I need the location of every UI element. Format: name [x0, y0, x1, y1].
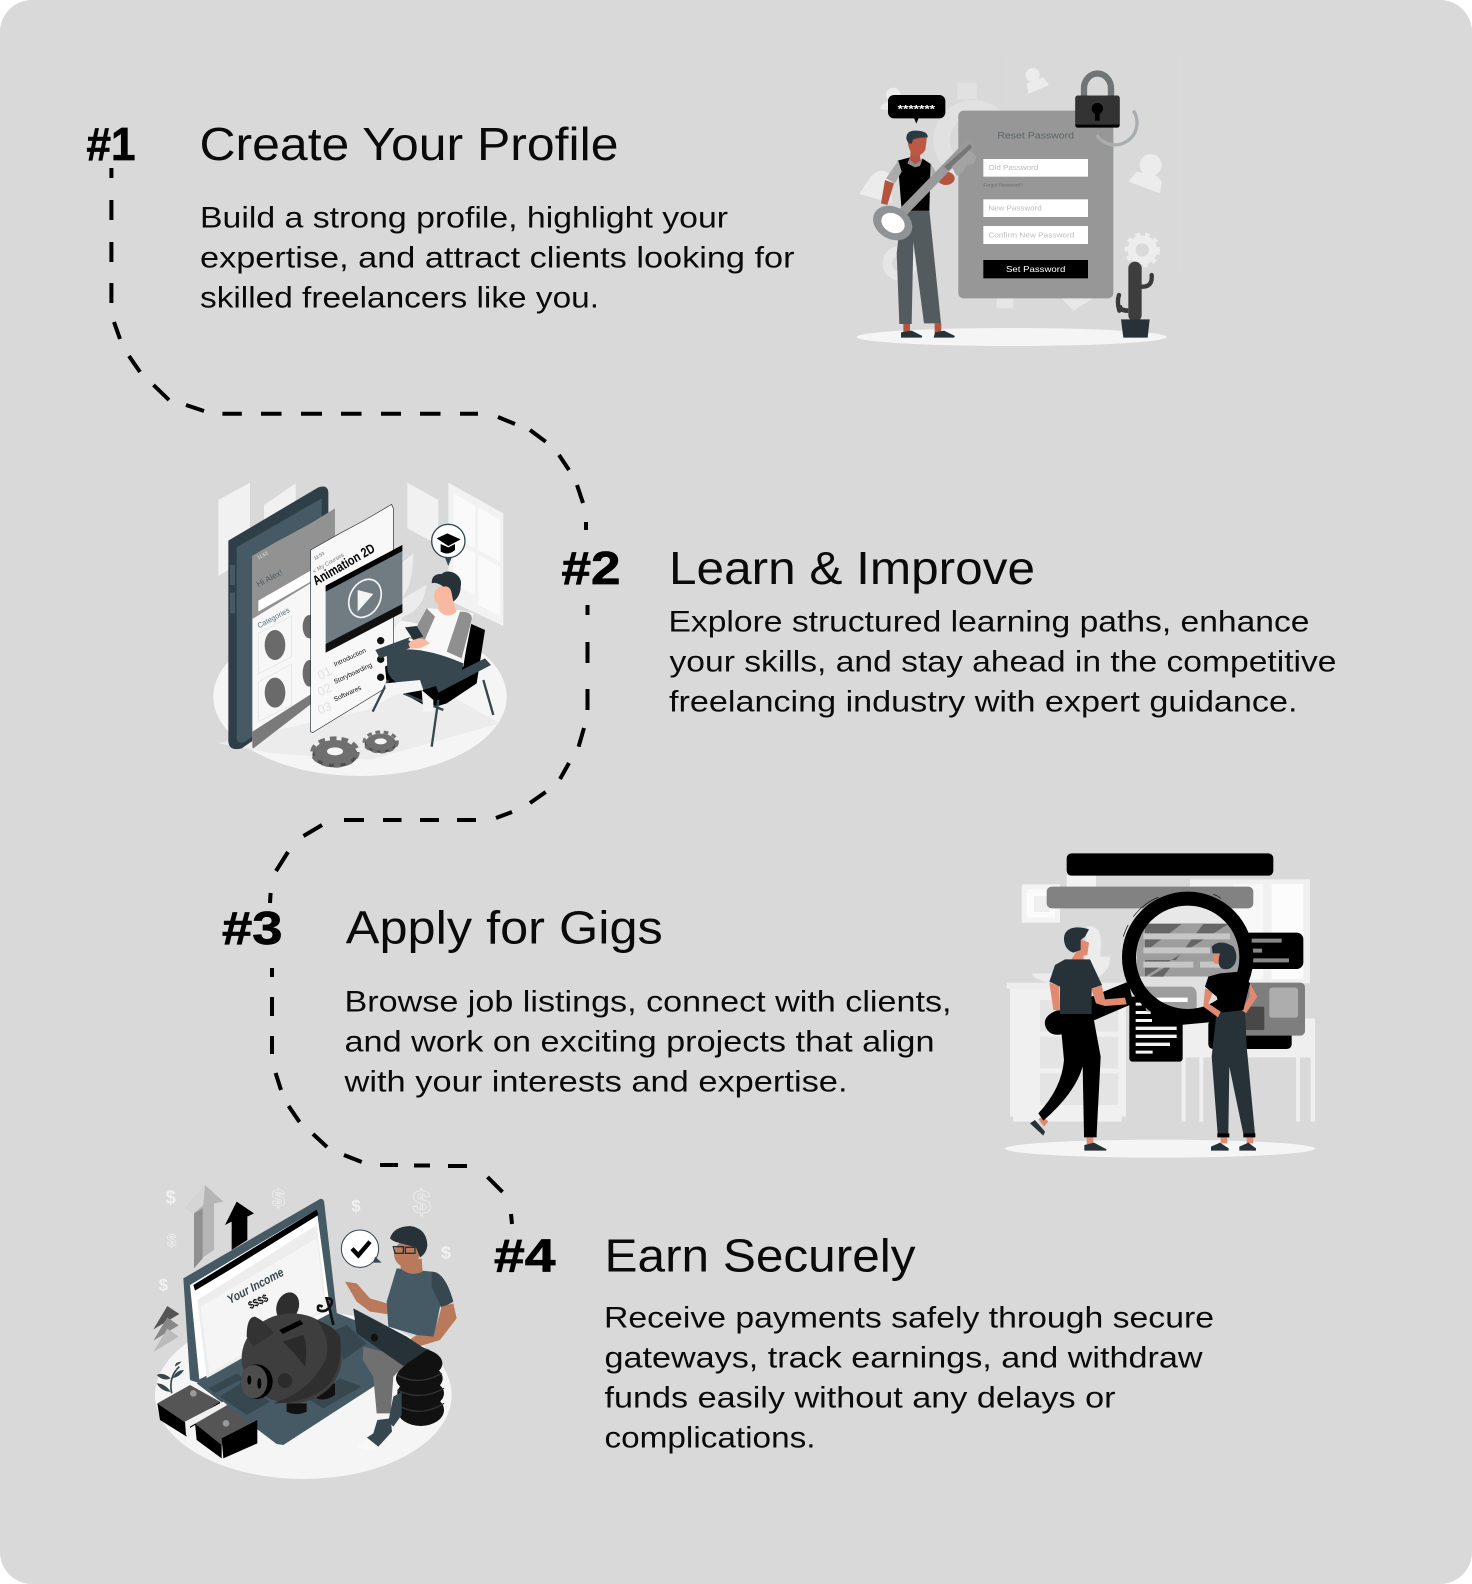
illustration: job search [1005, 853, 1315, 1158]
step 4 description: gateways, track earnings, and withdraw [604, 1342, 1203, 1375]
padlock [1075, 73, 1120, 128]
greeting text: Hi Alex! [255, 567, 284, 589]
dollar signs: $ [167, 1231, 177, 1250]
lesson list: Softwares [333, 684, 363, 703]
ground [1005, 1140, 1315, 1158]
forgot password: Forgot Password? [983, 183, 1023, 188]
coin stack [394, 1349, 444, 1426]
black arrow [225, 1202, 254, 1250]
magnifier [1045, 894, 1246, 1035]
video player [326, 545, 402, 653]
old password field: Old Password [988, 165, 1038, 172]
window [448, 483, 503, 626]
course card [310, 504, 402, 733]
form panel [958, 111, 1113, 298]
speech bubble: ******* [898, 103, 936, 115]
ghost gear left [887, 251, 913, 276]
floor ellipse [213, 617, 507, 776]
dollar signs: $ [165, 1186, 176, 1207]
phone screen [252, 508, 336, 748]
speech bubble [888, 95, 945, 124]
plant [157, 1362, 184, 1393]
illustration: online learning [213, 483, 507, 776]
step 2 description: your skills, and stay ahead in the competitive [670, 646, 1336, 679]
faint background frames [842, 48, 1179, 274]
woman [1203, 942, 1257, 1151]
step 2 number: #2 [562, 542, 620, 594]
dollar signs: $ [351, 1196, 361, 1215]
cactus [1118, 262, 1152, 338]
categories label: Categories [256, 605, 292, 630]
check bubble [341, 1230, 382, 1267]
step 4 number: #4 [494, 1230, 556, 1282]
student [385, 571, 473, 712]
new password field: New Password [988, 206, 1042, 213]
dark phone [228, 486, 328, 749]
background furniture [1007, 875, 1315, 1122]
ghost gear [942, 83, 1093, 311]
top black bar [1067, 853, 1273, 876]
set password button: Set Password [1006, 264, 1066, 274]
document [1129, 997, 1183, 1062]
lesson list: 03 [315, 699, 334, 718]
step 1 title: Create Your Profile [200, 118, 618, 170]
graduation cap bubble [432, 524, 465, 566]
lesson list: 01 [315, 664, 334, 683]
dollar signs: $ [159, 1276, 169, 1295]
step 4 description: complications. [604, 1422, 816, 1455]
step 1 description: skilled freelancers like you. [200, 281, 599, 314]
step 3 number: #3 [222, 902, 282, 954]
ground [857, 328, 1167, 346]
person with key [867, 131, 977, 338]
confirm password field: Confirm New Password [988, 232, 1074, 239]
step 4 [494, 1230, 1214, 1455]
lesson list: Storyboarding [333, 662, 374, 686]
illustration: reset password [842, 48, 1179, 346]
cash stacks [157, 1385, 257, 1458]
step 3 description: Browse job listings, connect with clients, [344, 986, 952, 1019]
gray arrow [185, 1185, 223, 1268]
time label: 11:53 [256, 550, 269, 560]
lesson list [315, 637, 384, 718]
illustration: earnings [153, 1184, 457, 1479]
form heading: Reset Password [997, 131, 1074, 141]
gray triangles [153, 1306, 179, 1352]
step 3 description: with your interests and expertise. [343, 1066, 848, 1099]
floor shadow [218, 680, 500, 760]
income label: Your Income [225, 1265, 286, 1307]
step 2 [562, 542, 1336, 719]
laptop [183, 1199, 430, 1445]
chair [373, 623, 493, 747]
dollar amount: $$$$ [247, 1292, 270, 1312]
man with laptop [345, 1226, 457, 1450]
step 1 description: expertise, and attract clients looking for [200, 241, 794, 274]
dollar signs [159, 1184, 451, 1295]
piggy bank [241, 1313, 342, 1414]
dashed connector path [111, 168, 588, 1224]
step 1 number: #1 [86, 118, 136, 170]
refresh ring [1097, 111, 1137, 145]
courses link: < My Courses [312, 552, 345, 575]
step 2 description: freelancing industry with expert guidance. [669, 686, 1298, 719]
step 4 description: Receive payments safely through secure [604, 1302, 1214, 1335]
ghost gear right [1127, 235, 1158, 265]
dollar signs: $ [412, 1184, 431, 1221]
dollar signs: $ [272, 1185, 285, 1212]
man [1030, 927, 1127, 1151]
wall frames [218, 483, 438, 576]
step 2 description: Explore structured learning paths, enhance [668, 606, 1310, 639]
step 3 description: and work on exciting projects that align [344, 1026, 934, 1059]
step 2 title: Learn & Improve [669, 542, 1035, 594]
step 4 description: funds easily without any delays or [604, 1382, 1116, 1415]
course title: Animation 2D [310, 540, 378, 588]
gray bar [1047, 887, 1253, 908]
right cards [1208, 933, 1305, 1049]
dollar signs: $ [441, 1243, 451, 1263]
lesson list: Introduction [333, 647, 368, 668]
step 4 title: Earn Securely [604, 1230, 916, 1282]
floor ellipse [155, 1311, 452, 1479]
step 1 [86, 118, 794, 314]
step 3 [222, 902, 952, 1099]
step 3 title: Apply for Gigs [346, 902, 663, 954]
gears [312, 732, 397, 767]
step 1 description: Build a strong profile, highlight your [200, 201, 728, 234]
lesson list: 02 [315, 681, 334, 699]
coin and ring [272, 1289, 333, 1325]
ghost user icons [859, 68, 1162, 203]
plant ghost [393, 553, 427, 630]
course time: 11:53 [313, 551, 326, 561]
